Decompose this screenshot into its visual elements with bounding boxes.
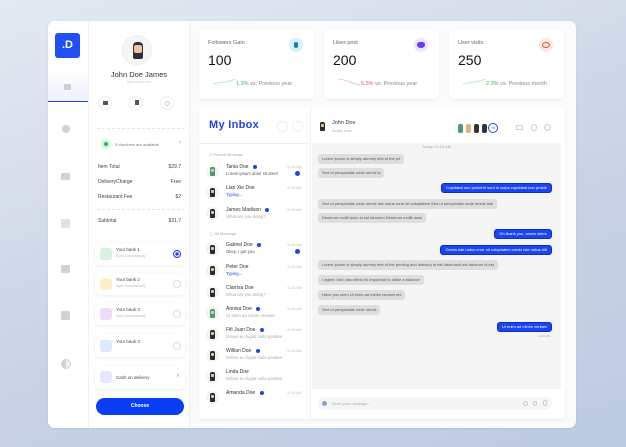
text: 11:03 AM [287, 243, 302, 247]
text: 11:03 AM [287, 286, 302, 290]
stat: followers: Followers Gain [208, 40, 245, 46]
stat: likes: 5.3% vs. Previous year [361, 81, 417, 87]
messages [318, 154, 404, 164]
stat: likes: Likes post [333, 40, 358, 46]
message list: ⊙ Pinned Message [209, 152, 243, 157]
text: Dolore eu fugiat nulla pariatur [226, 334, 282, 339]
profile panel: $29.7 [168, 164, 181, 170]
text: Tania Doe [226, 164, 249, 170]
text: Deserunt mollit anim id est laborum Deserunt mollit anim [322, 215, 422, 220]
chat header: John Doe [332, 120, 356, 126]
text: 11:03 AM [538, 334, 550, 338]
cash on delivery [95, 366, 185, 389]
text: Fifi Juan Doe [226, 327, 255, 333]
text: Dolore eu fugiat nulla pariatur [226, 376, 282, 381]
profile panel: @userjohn_doe [127, 80, 151, 84]
stat: visits: User visits [458, 40, 483, 46]
text: Okey, I got you [226, 249, 255, 254]
bank 3: Your bank 3 [116, 307, 140, 312]
text: Linda Doe [226, 369, 249, 375]
stat: followers: 100 [208, 52, 231, 68]
text: Amanda Doe [226, 390, 255, 396]
stat: likes [324, 30, 439, 99]
avatar [122, 35, 152, 65]
bank 1 [95, 243, 185, 265]
text: Sed ut perspiciatis unde omnis [322, 307, 376, 312]
chat header [320, 120, 551, 133]
chat header: +4 [491, 126, 495, 130]
text: What are you doing? [226, 214, 266, 219]
choose button: Choose [131, 403, 149, 409]
bank 1: Your bank 1 [116, 247, 140, 252]
text: 11:03 AM [287, 391, 302, 395]
text: Cupidatat non proident sunt in culpa cupidatat non proide [446, 185, 547, 190]
cash on delivery: Cash on delivery [116, 375, 150, 380]
profile panel: Free [171, 179, 181, 185]
chat header: Active now [332, 128, 351, 133]
profile panel: $2 [175, 194, 181, 200]
profile panel: DeliveryCharge [98, 179, 132, 185]
text: 11:03 AM [287, 349, 302, 353]
text: Gabriel Doe [226, 242, 253, 248]
text: Have you seen Ut enim ad minim veniam eni [322, 292, 401, 297]
inbox title: My Inbox [209, 119, 259, 131]
text: James Madison [226, 207, 261, 213]
bank 2 [95, 273, 185, 295]
input [318, 397, 552, 410]
messages: Lorem Ipsum is simply dummy text of the pri [322, 156, 400, 161]
text: Lorem ipsum dolor sit amet [226, 171, 278, 176]
text: Ut enim ad minim veniam [502, 324, 547, 329]
cash on delivery: › [177, 372, 179, 379]
text: Omnis iste natus error sit voluptatem omnis iste natus ditt [445, 247, 547, 252]
bank 2: Your bank 2 [116, 277, 140, 282]
text: Lian Xie Doe [226, 185, 255, 191]
text: 11:03 AM [287, 307, 302, 311]
text: Peter Doe [226, 264, 249, 270]
text: Sed ut perspiciatis unde omnis iste natus error sit voluptatem Sed ut perspiciatis unde omnis iste [322, 201, 493, 206]
totals: Item Total [98, 164, 120, 170]
profile panel: $31.7 [168, 218, 181, 224]
logo: .D [62, 39, 73, 51]
text: Sed ut perspiciatis unde omnis is [322, 170, 380, 175]
chat body [312, 143, 561, 389]
nav icons [61, 125, 71, 369]
nav home active [48, 71, 88, 102]
text: 11:03 AM [287, 186, 302, 190]
stat: followers: 1.3% vs. Previous year [236, 81, 292, 87]
stat: visits [449, 30, 564, 99]
profile panel [88, 21, 190, 428]
text: 11:03 AM [287, 265, 302, 269]
logo [55, 33, 80, 58]
choose button [96, 398, 184, 415]
text: Clarrisa Doe [226, 285, 254, 291]
profile panel: Subtotal [98, 218, 116, 224]
text: 11:03 AM [287, 165, 302, 169]
bank 3: Sync Automatically [116, 314, 145, 318]
input: Send your message... [332, 401, 371, 406]
icon row [98, 96, 174, 110]
message list: ◯ All Message [209, 231, 236, 236]
text: 11:03 AM [287, 208, 302, 212]
text: What are you doing? [226, 292, 266, 297]
bank 1: Sync Automatically [116, 254, 145, 258]
text: Willian Doe [226, 348, 251, 354]
text: Typing... [226, 271, 242, 276]
text: Oh thank you, omnis istenr [499, 231, 547, 236]
profile panel: Restaurant Fee [98, 194, 132, 200]
inbox panel [199, 107, 565, 419]
voucher: 3 Vouchers are available [115, 142, 159, 147]
text: I agree, but I also think it's important to strike a balance [322, 277, 420, 282]
bank 3b [95, 335, 185, 357]
text: Annisa Doe [226, 306, 252, 312]
text: 11:03 AM [287, 328, 302, 332]
text: Dolore eu fugiat nulla pariatur [226, 355, 282, 360]
bank 2: Sync Automatically [116, 284, 145, 288]
voucher: › [179, 140, 181, 146]
text: Typing... [226, 192, 242, 197]
stat: visits: 2.3% vs. Previous month [486, 81, 547, 87]
sidebar [48, 21, 88, 428]
message list [209, 152, 243, 236]
voucher [101, 139, 181, 149]
main card [48, 21, 576, 428]
bank 3 [95, 303, 185, 325]
stat: likes: 200 [333, 52, 356, 68]
text: Lorem Ipsum is simply dummy text of the printing and industry id est laborumid est laborum id est [322, 262, 494, 267]
stat: followers [199, 30, 314, 99]
text: Ut enim ad minim veniam [226, 313, 274, 318]
bank 3b: Your bank 3 [116, 339, 140, 344]
chat body: Today, 11:03 AM [422, 144, 451, 149]
name: John Doe James [111, 70, 167, 79]
stat: visits: 250 [458, 52, 481, 68]
